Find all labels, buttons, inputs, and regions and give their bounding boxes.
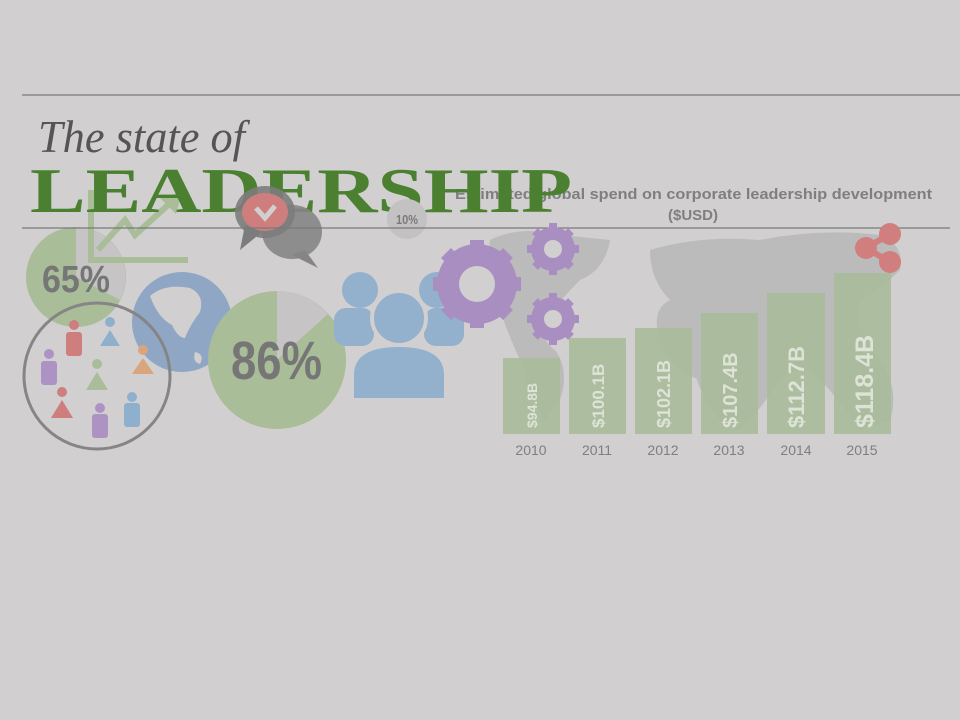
- title: The state of: [38, 111, 251, 162]
- bar chart: $112.7B: [784, 346, 809, 428]
- bar chart: $107.4B: [720, 352, 742, 428]
- icon: people circle: [24, 303, 170, 449]
- icon: 10% circle: [387, 199, 427, 239]
- bar chart: $102.1B: [654, 360, 674, 428]
- bar chart: 2014: [780, 442, 812, 458]
- icon: share: [855, 223, 901, 273]
- world map: [489, 231, 901, 430]
- chart title: ($USD): [668, 207, 718, 224]
- bar chart: 2010: [515, 442, 547, 458]
- icon: globe: [132, 272, 232, 372]
- icon: 65% pie chart: 65%: [42, 259, 110, 301]
- bar chart: $100.1B: [589, 364, 608, 428]
- icon: 86% pie chart: [208, 291, 346, 429]
- icon: speech bubbles: [235, 186, 322, 268]
- chart title: [455, 186, 932, 224]
- bar chart: 2012: [647, 442, 679, 458]
- bar chart: $94.8B: [524, 383, 540, 428]
- bar chart: 2015: [846, 442, 878, 458]
- icon: 86% pie chart: 86%: [231, 331, 322, 391]
- icon: 10% circle: 10%: [396, 212, 418, 227]
- icon: 65% pie chart: [26, 227, 126, 327]
- bar chart: [503, 273, 891, 458]
- icon: growth chart: [91, 190, 188, 260]
- bar chart: $118.4B: [851, 335, 879, 428]
- bar chart: 2013: [713, 442, 745, 458]
- icon: team people: [334, 272, 464, 400]
- icon: gears: [433, 223, 579, 345]
- title: LEADERSHIP: [30, 155, 572, 226]
- bar chart: 2011: [582, 442, 612, 458]
- chart title: Estimated global spend on corporate leadership development: [455, 186, 932, 203]
- title: [30, 111, 572, 226]
